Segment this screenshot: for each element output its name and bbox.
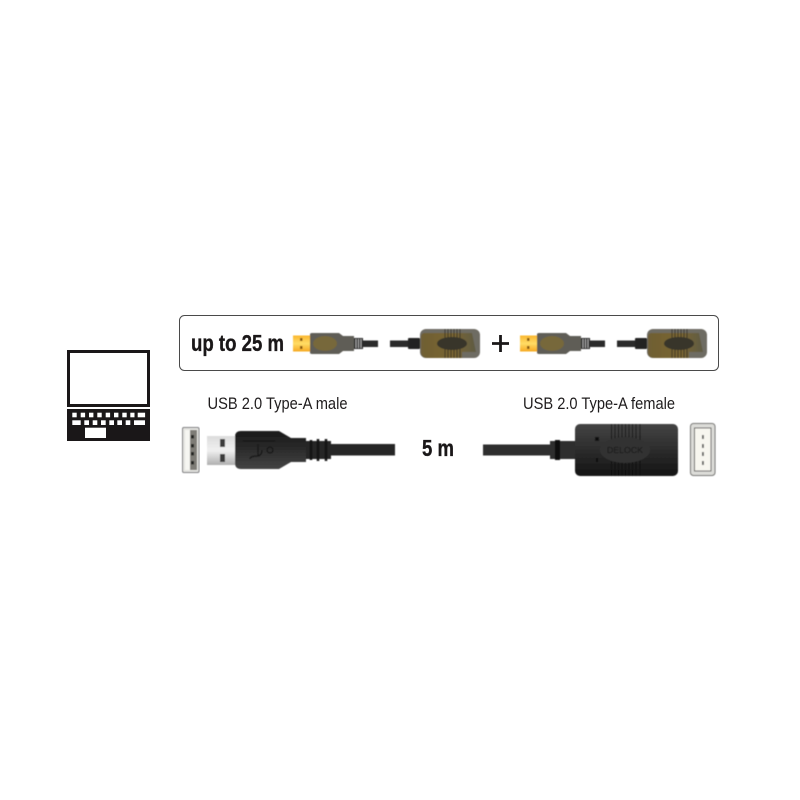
icon: male port front view — [182, 428, 199, 472]
small male connector 1 — [293, 333, 378, 354]
label: cable length 5 m: 5 m — [422, 435, 454, 461]
metal plug — [207, 436, 237, 465]
strain relief — [550, 441, 576, 459]
icon: female port front view — [690, 424, 715, 476]
small female connector 1 — [390, 329, 480, 358]
cable — [330, 444, 395, 456]
label: USB 2.0 Type-A female: USB 2.0 Type-A female — [523, 394, 675, 413]
heading: up to 25 m: up to 25 m — [191, 330, 284, 356]
label: USB 2.0 Type-A male: USB 2.0 Type-A male — [208, 394, 348, 413]
male USB connector — [207, 431, 395, 469]
small male connector 2 — [520, 333, 605, 354]
icon: laptop — [67, 352, 150, 441]
cable — [483, 444, 551, 456]
panel: up to 25 m — [180, 316, 718, 370]
plug body — [235, 431, 306, 469]
strain relief — [304, 441, 331, 459]
female USB connector — [483, 424, 678, 476]
housing — [575, 424, 678, 476]
logo oval — [600, 437, 650, 463]
plus sign — [492, 335, 509, 352]
female USB connector: DELOCK — [607, 446, 644, 455]
USB logo — [243, 441, 275, 459]
small female connector 2 — [617, 329, 707, 358]
